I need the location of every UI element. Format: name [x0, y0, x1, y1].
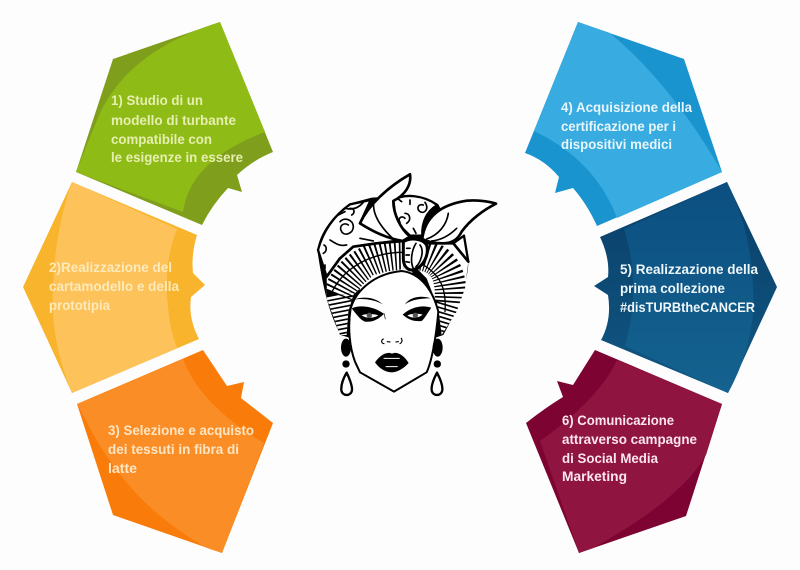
panel: step 5 navy — [594, 182, 777, 393]
band outlines — [327, 241, 468, 277]
text: step 6: attraverso campagne — [562, 432, 697, 447]
turban silhouette — [317, 195, 468, 338]
text: step 2: prototipia — [49, 298, 110, 313]
right tail of bow — [422, 200, 496, 243]
crown swirls right — [397, 198, 427, 233]
text: step 3: 3) Selezione e acquisto — [108, 423, 254, 438]
patterned right crown — [393, 196, 437, 236]
text: step 6: di Social Media — [562, 451, 658, 466]
eyebrows — [355, 297, 431, 304]
panel: step 2 yellow — [23, 182, 205, 393]
text: step 1: modello di turbante — [111, 113, 236, 128]
text: step 1: le esigenze in essere — [111, 150, 243, 165]
text: step 4: certificazione per i — [561, 119, 676, 134]
text: step 3: latte — [108, 461, 138, 476]
lips — [375, 353, 409, 372]
text: step 4: dispositivi medici — [561, 137, 672, 152]
panel: step 4 light blue — [525, 22, 722, 226]
text: step 6: 6) Comunicazione — [562, 413, 674, 428]
striped band right — [418, 244, 468, 335]
left tail of bow — [360, 174, 410, 241]
text: step 6: Marketing — [562, 469, 627, 484]
panel: step 1 green — [76, 22, 273, 225]
small right crown — [453, 236, 468, 262]
text: step 1: 1) Studio di un — [111, 93, 203, 108]
left eye — [352, 306, 385, 322]
face — [349, 271, 438, 392]
text: step 5: #disTURBtheCANCER — [620, 300, 755, 315]
left earring — [341, 339, 352, 395]
text: step 1: compatibile con — [111, 132, 212, 147]
right eye — [403, 306, 431, 321]
panel: step 6 maroon — [526, 350, 722, 553]
crown swirls left — [323, 202, 373, 268]
text: step 4: 4) Acquisizione della — [561, 100, 692, 115]
text: step 3: dei tessuti in fibra di — [108, 442, 239, 457]
illustration: woman with turban — [317, 174, 496, 395]
text: step 2: cartamodello e della — [49, 279, 179, 294]
patterned left crown — [318, 200, 402, 277]
text: step 5: 5) Realizzazione della — [620, 262, 758, 277]
right earring — [432, 339, 443, 395]
knot — [403, 239, 427, 270]
text: step 5: prima collezione — [620, 281, 725, 296]
text: step 2: 2)Realizzazione del — [49, 260, 172, 275]
striped band left — [326, 242, 404, 335]
nose — [382, 338, 402, 344]
panel: step 3 orange — [77, 350, 273, 553]
